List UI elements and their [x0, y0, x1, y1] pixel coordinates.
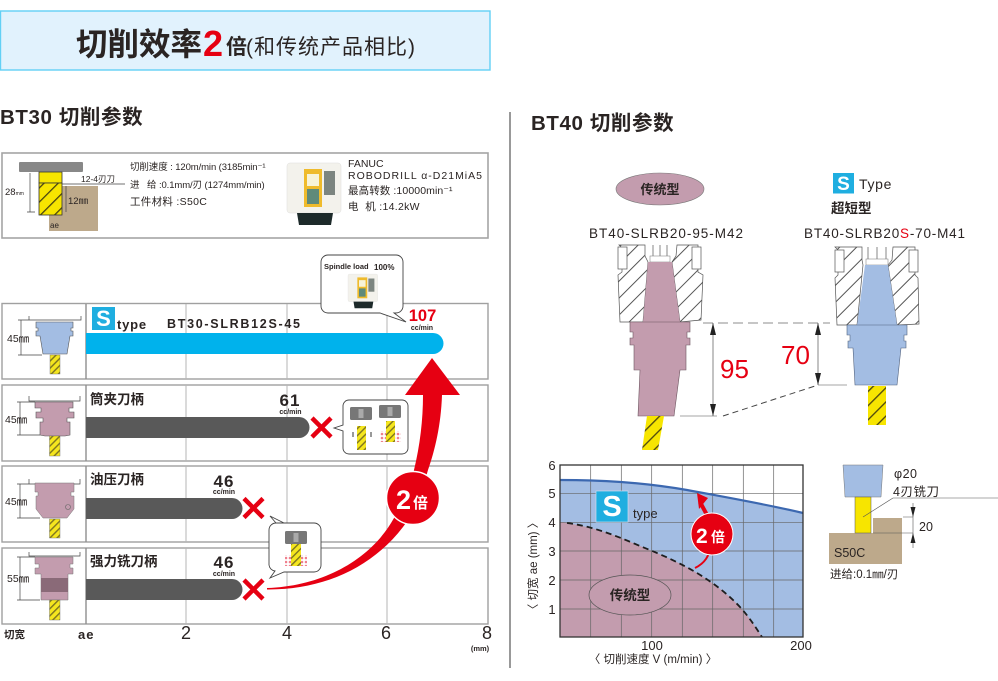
diagram: cutting setup: 进给:0.1㎜/刃: [830, 568, 898, 581]
bar: S type: [86, 333, 444, 354]
axis labels: 1: [548, 602, 556, 617]
tool holder: S type: [7, 316, 81, 374]
arrow: 2x increase: 2: [396, 485, 411, 515]
icon: cutting diagram: 12㎜: [68, 196, 89, 207]
callout: spindle load: [321, 255, 406, 322]
value: 46: cc/min: [213, 571, 235, 578]
axis: cutting width: 切宽: [4, 628, 25, 641]
bar: collet: [86, 417, 310, 438]
label: S type: S: [837, 174, 850, 195]
text block: cutting conditions: 进 给 :0.1mm/刃 (1274mm/min): [130, 179, 265, 191]
callout: spindle load: Spindle load: [324, 262, 369, 271]
dimension: 95 and 70: 95: [720, 354, 749, 384]
title: (和传统产品相比): [246, 36, 416, 59]
tool holder: power milling: [7, 552, 80, 620]
icon: x mark: [312, 418, 331, 437]
diagram: cutting setup: [829, 465, 998, 581]
tool holder: power milling: 55㎜: [7, 573, 30, 585]
diagram: cutting setup: φ20: [894, 467, 918, 481]
title: 切削效率: [76, 26, 202, 62]
label: collet holder: 筒夹刀柄: [90, 391, 144, 407]
value: 61: cc/min: [279, 409, 302, 416]
badge: S: S: [96, 306, 111, 331]
row: power milling holder: [7, 552, 263, 620]
arrow: 2x: 2: [696, 525, 708, 548]
tool holder: collet: [5, 396, 80, 456]
title: 2: [203, 23, 223, 64]
text block: machine spec: 最高转数 :10000min⁻¹: [348, 184, 453, 197]
tool holder: hydraulic: 45㎜: [5, 496, 28, 508]
tool holder: S type: 45㎜: [7, 333, 30, 345]
bar: power milling: [86, 579, 242, 600]
badge: S type: S: [602, 491, 622, 523]
label: type: type: [117, 317, 147, 332]
axis labels: 3: [548, 544, 556, 559]
title: 倍: [226, 35, 247, 59]
icon: cutting diagram: ae: [50, 221, 59, 230]
value: 46: cc/min: [213, 489, 235, 496]
axis labels: 〈 切削速度 V (m/min) 〉: [589, 652, 717, 666]
header banner: [0, 11, 490, 70]
diagram: cutting setup: 4刃铣刀: [893, 485, 939, 499]
ellipse: conventional: [589, 575, 671, 615]
axis: cutting width: (mm): [471, 644, 490, 653]
arrow: 2x increase: [267, 358, 460, 590]
label: hydraulic holder: 油压刀柄: [90, 471, 144, 487]
label: conventional: [616, 173, 704, 205]
row: hydraulic holder: [5, 471, 263, 538]
axis: cutting width: ae: [78, 627, 94, 642]
panel: BT30 cutting parameters: [2, 153, 488, 238]
axis: cutting width: 6: [381, 623, 391, 643]
line: conventional limit: [567, 523, 762, 637]
text block: cutting conditions: [130, 161, 265, 208]
icon: x mark: [244, 580, 263, 599]
ellipse: conventional: 传统型: [610, 587, 650, 603]
arrow: 2x increase: 倍: [413, 494, 428, 512]
label: S type: 超短型: [831, 200, 872, 216]
axis: cutting width: 2: [181, 623, 191, 643]
axis labels: [526, 458, 812, 666]
value: 46: 46: [214, 553, 234, 572]
text block: cutting conditions: 切削速度 : 120m/min (3185min⁻¹: [130, 161, 265, 173]
tool holder: hydraulic: [5, 479, 80, 538]
label: S type: [831, 173, 892, 216]
label: S model: BT40-SLRB20S-70-M41: [804, 226, 965, 241]
text block: machine spec: ROBODRILL α-D21MiA5: [348, 170, 482, 182]
chart: cutting width rows: [2, 255, 492, 653]
axis: cutting width: 4: [282, 623, 292, 643]
axis: cutting width: [4, 623, 492, 653]
arrow: 2x: 倍: [711, 529, 725, 545]
icon: x mark: [244, 498, 263, 518]
callout: chatter: [334, 400, 408, 454]
value: 46: 46: [214, 472, 234, 491]
callout: spindle load: 100%: [374, 263, 394, 272]
icon: cutting diagram: 28mm: [5, 187, 24, 198]
icon: cutting diagram: 12-4刃刀: [81, 174, 115, 184]
text block: machine spec: FANUC: [348, 158, 384, 170]
value: 61: 61: [280, 391, 300, 410]
icon: cutting diagram: [5, 162, 125, 231]
line: S type limit: [560, 480, 803, 513]
value: 107: cc/min: [411, 325, 433, 332]
badge: S: [92, 306, 115, 331]
label: conventional: 传统型: [640, 182, 680, 197]
axis labels: 100: [641, 638, 663, 653]
text block: machine spec: 电 机 :14.2kW: [348, 200, 420, 213]
heading: BT30: BT30 切削参数: [0, 105, 143, 129]
dimension: 95 and 70: [680, 323, 847, 416]
text block: cutting conditions: 工件材料 :S50C: [130, 195, 207, 208]
row: S type: [7, 306, 444, 374]
row: collet holder: [5, 391, 408, 456]
axis labels: 200: [790, 638, 812, 653]
axis labels: 4: [548, 515, 556, 530]
diagram: cutting setup: S50C: [834, 546, 865, 560]
dimension: 95 and 70: 70: [781, 340, 810, 370]
axis: cutting width: 8: [482, 623, 492, 643]
label: conventional model: BT40-SLRB20-95-M42: [589, 226, 743, 241]
value: 107: 107: [409, 307, 436, 325]
label: power milling holder: 强力铣刀柄: [90, 553, 158, 569]
axis labels: 2: [548, 573, 556, 588]
label: model: BT30-SLRB12S-45: [167, 317, 300, 331]
badge: S type: type: [633, 506, 658, 521]
text block: machine spec: [348, 158, 482, 213]
area: conventional: [560, 522, 762, 637]
icon: machining center: [287, 163, 341, 225]
arrow: 2x: [691, 493, 733, 568]
axis labels: 〈 切宽 ae (mm) 〉: [526, 517, 540, 615]
axis labels: 5: [548, 486, 556, 501]
chart: cutting speed vs width: [526, 458, 812, 666]
heading: BT40: BT40 切削参数: [531, 111, 674, 135]
tool holder: collet: 45㎜: [5, 414, 28, 426]
diagram: S type holder: [835, 247, 919, 425]
label: S type: Type: [859, 176, 892, 192]
diagram: conventional holder: [618, 245, 703, 450]
divider: [510, 112, 511, 668]
area: S type: [560, 480, 803, 637]
bar: hydraulic: [86, 498, 242, 519]
callout: chatter tool: [269, 516, 321, 578]
diagram: cutting setup: 20: [919, 520, 933, 534]
badge: S type: [596, 491, 658, 523]
axis labels: 6: [548, 458, 556, 473]
